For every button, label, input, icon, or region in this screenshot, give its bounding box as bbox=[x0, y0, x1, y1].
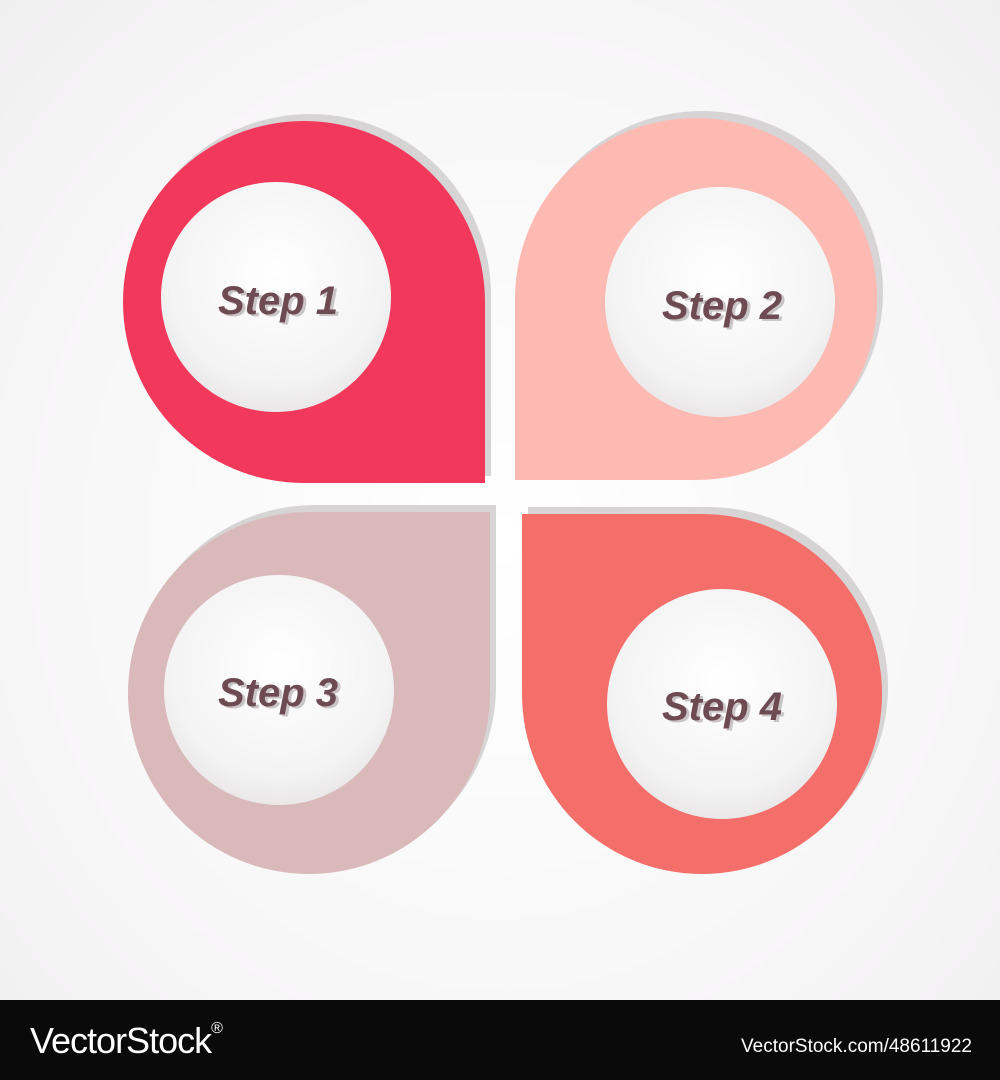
label: step 4: Step 4 bbox=[662, 685, 782, 729]
label: step 4: Step 4 bbox=[665, 687, 785, 731]
footer bar bbox=[0, 1000, 1000, 1080]
label: step 1: Step 1 bbox=[218, 279, 338, 323]
label: step 3: Step 3 bbox=[218, 671, 338, 715]
label: step 3: Step 3 bbox=[221, 673, 341, 717]
label: step 2: Step 2 bbox=[662, 284, 782, 328]
petal: step 1 bbox=[123, 114, 491, 483]
petal: step 4 bbox=[522, 507, 888, 874]
footer url: VectorStock.com/48611922 bbox=[741, 1036, 972, 1057]
label: step 1: Step 1 bbox=[221, 281, 341, 325]
label: step 2: Step 2 bbox=[665, 286, 785, 330]
petal: step 2 bbox=[515, 111, 883, 480]
petal: step 3 bbox=[128, 505, 496, 874]
footer logo text: VectorStock® bbox=[30, 1020, 222, 1061]
